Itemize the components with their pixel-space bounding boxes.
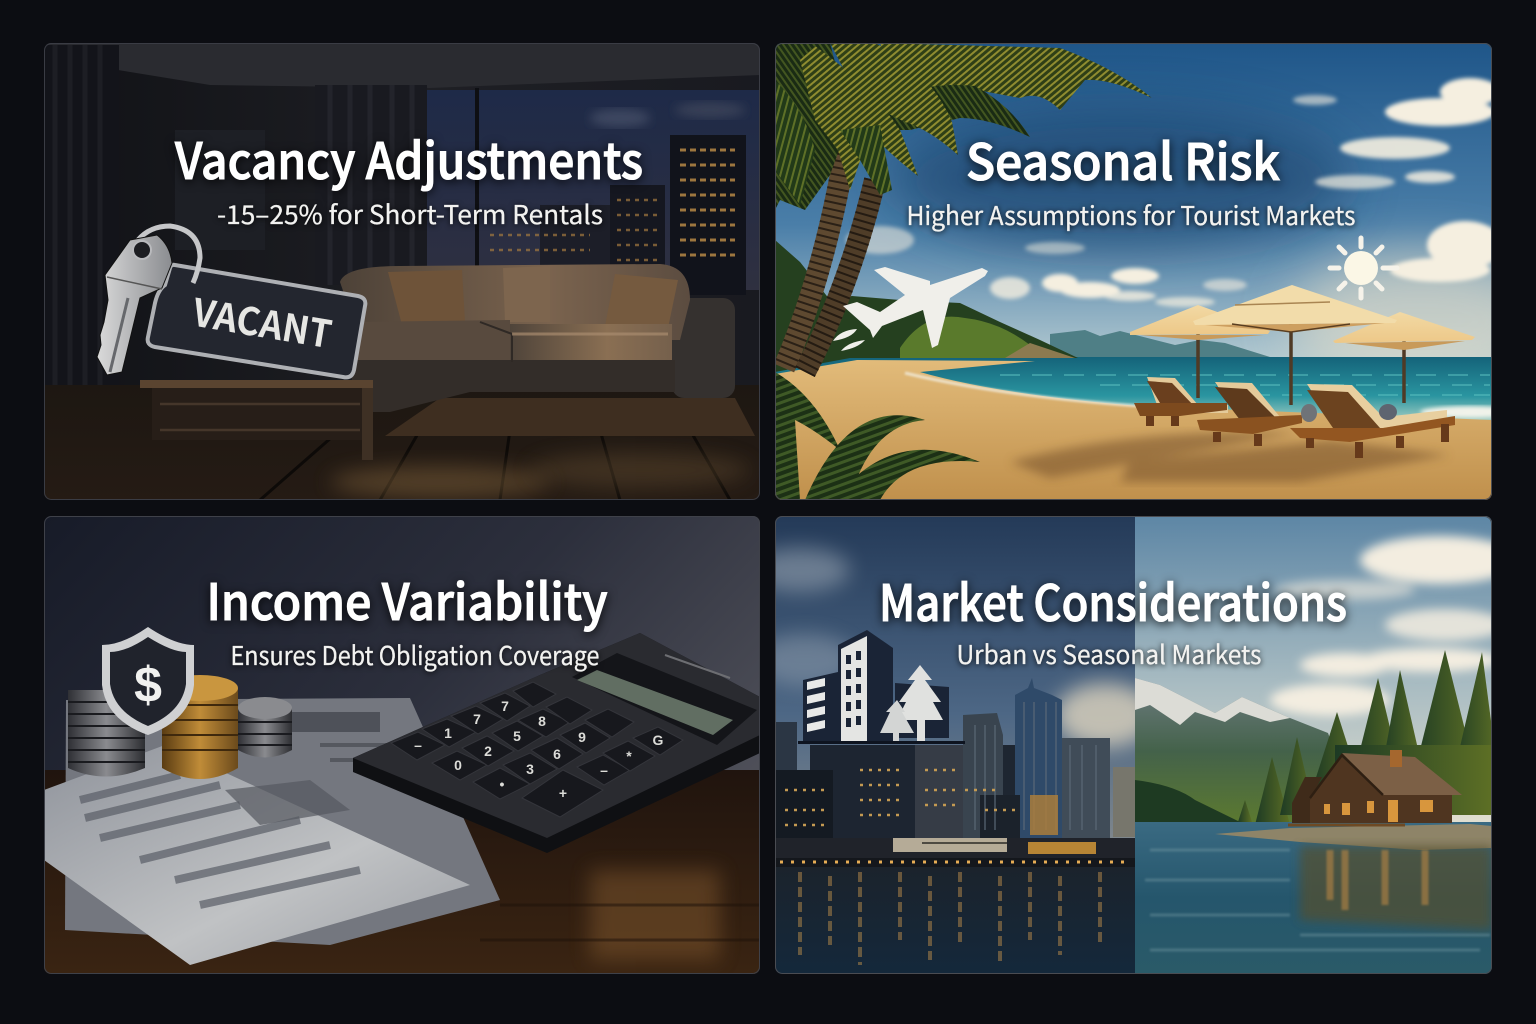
fern plant: [775, 372, 980, 500]
calculator key labels: –: [600, 762, 608, 778]
seasonal half: [1135, 516, 1520, 974]
side dresser: [140, 380, 373, 460]
seasonal sky: [1135, 516, 1492, 826]
night window with city: [427, 88, 760, 295]
icon: dollar shield: $: [134, 657, 162, 713]
clouds: [846, 78, 1503, 307]
icon: airplane: [833, 267, 988, 351]
palm fronds: [775, 43, 1152, 210]
subheading: urban vs seasonal: Urban vs Seasonal Markets: [956, 635, 1262, 672]
calculator key labels: 5: [513, 728, 521, 744]
umbrellas: [1130, 285, 1475, 405]
floor: [44, 385, 760, 500]
icon: key with vacant tag: [97, 226, 365, 377]
calculator key labels: 3: [526, 761, 534, 777]
wooden table: [44, 770, 760, 974]
calculator key labels: 0: [454, 757, 462, 773]
sun loungers: [1134, 377, 1455, 458]
calculator key labels: 1: [444, 725, 452, 741]
calculator key labels: +: [559, 785, 567, 801]
heading: income variability: Income Variability: [206, 563, 608, 635]
curtains: [44, 45, 427, 385]
icon: dollar shield: [102, 627, 194, 735]
subheading: short-term rentals: -15–25% for Short-Term Rentals: [217, 195, 603, 232]
cabin: [1288, 750, 1462, 825]
vacant tag: VACANT: [188, 282, 336, 359]
subheading: debt obligation coverage: Ensures Debt Obligation Coverage: [230, 636, 600, 673]
city skyline: [775, 678, 1135, 867]
sofa: [340, 264, 735, 412]
sand shadows: [1010, 432, 1450, 482]
icon: sun: [1330, 238, 1397, 298]
calculator screen: [572, 653, 757, 745]
panel: vacancy adjustments: [44, 43, 760, 500]
palm trees: [775, 43, 1152, 372]
palm trunks: [784, 140, 875, 372]
calculator: [353, 633, 760, 853]
green headland: [775, 240, 1078, 372]
panel: market considerations: [750, 516, 1520, 974]
rug: [385, 398, 755, 436]
coin stacks: [68, 675, 292, 779]
sand beach: [775, 360, 1492, 500]
shore and water: [1135, 822, 1492, 974]
pine forest: [1238, 650, 1500, 825]
calculator key labels: G: [653, 732, 664, 748]
panel: income variability: [44, 516, 760, 974]
calculator key labels: 6: [553, 746, 561, 762]
calculator key labels: 2: [484, 743, 492, 759]
icon: key: [97, 226, 200, 375]
heading: seasonal risk: Seasonal Risk: [966, 123, 1280, 195]
calculator key labels: [414, 698, 664, 801]
calculator keys: [391, 682, 683, 817]
sky: [775, 43, 1492, 357]
financial papers: [44, 698, 500, 965]
room background: [46, 43, 760, 385]
calculator key labels: 8: [538, 713, 546, 729]
urban sky: [750, 516, 1155, 876]
seasonal clouds: [1270, 536, 1520, 716]
calculator key labels: *: [626, 748, 632, 764]
heading: market considerations: Market Considerations: [879, 564, 1347, 636]
snowy mountains: [1135, 678, 1345, 825]
urban water: [775, 867, 1135, 974]
calculator key labels: 7: [473, 711, 481, 727]
calculator key labels: 9: [578, 729, 586, 745]
dark wall: [44, 516, 760, 974]
calculator key labels: 7: [501, 698, 509, 714]
icon: buildings and pine trees: [798, 630, 965, 744]
distant mountains: [1050, 330, 1270, 357]
heading: vacancy adjustments: Vacancy Adjustments: [174, 122, 643, 194]
vacant tag: [148, 265, 365, 377]
calculator key labels: •: [500, 776, 505, 792]
panel: seasonal risk: [775, 43, 1536, 500]
subheading: tourist markets: Higher Assumptions for Tourist Markets: [906, 196, 1356, 233]
sea: [775, 357, 1520, 422]
urban half: [775, 516, 1135, 974]
shoreline foam: [905, 373, 1140, 406]
calculator key labels: –: [414, 737, 422, 753]
